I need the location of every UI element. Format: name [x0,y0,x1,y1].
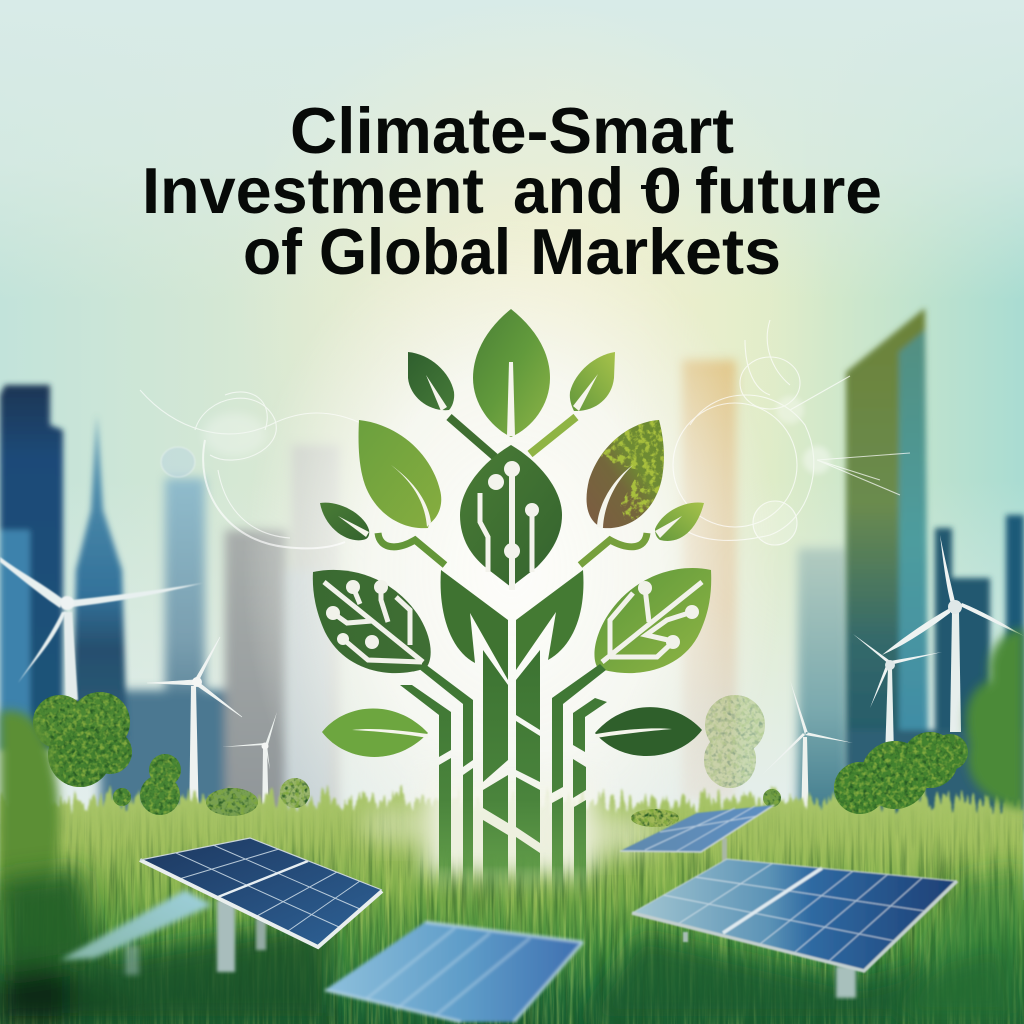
title [142,94,882,288]
solar panel: front right [632,859,957,998]
leaf: top left small [408,352,454,411]
title: Global [319,215,511,288]
solar panel: front left [140,838,382,972]
title: 0 [643,154,682,227]
title: future [695,154,882,227]
leaf: big right mossy [587,418,670,528]
leaf: centre circuit [460,445,562,590]
title: Markets [530,215,781,288]
leaf: circuit right [594,568,711,673]
circuit trunk [400,650,607,905]
title: and [513,154,624,227]
white glow behind tree [190,220,840,900]
upper V leaves [441,570,583,680]
leaf: low right [595,707,702,756]
meadow base [0,775,1024,1024]
solar panel: back right [620,805,774,872]
leaf: circuit left [313,570,431,673]
tree logo: leaves and circuit trunk [313,309,711,905]
leaf: low left [322,708,428,757]
solar panel: ghost left [60,890,212,975]
trees and bushes [33,692,968,827]
wind turbines, right [762,535,1024,822]
blurred city skyline [0,308,1024,830]
title: Investment [142,154,484,227]
solar panel: bottom centre [325,922,583,1022]
twig pair under top leaves [449,417,576,457]
grass blades and foreground foliage [0,628,1024,1024]
title: of [243,215,302,288]
energy wisps left [140,390,365,548]
leaf: top centre [473,309,550,437]
energy wisps right [673,320,910,545]
title: Climate-Smart [290,94,734,167]
wind turbines, left [0,557,277,826]
curled branches [378,533,647,565]
leaf: small left [320,503,369,540]
leaf: big left [359,420,441,528]
leaf: small right [655,503,704,541]
leaf: top right small [570,352,615,411]
